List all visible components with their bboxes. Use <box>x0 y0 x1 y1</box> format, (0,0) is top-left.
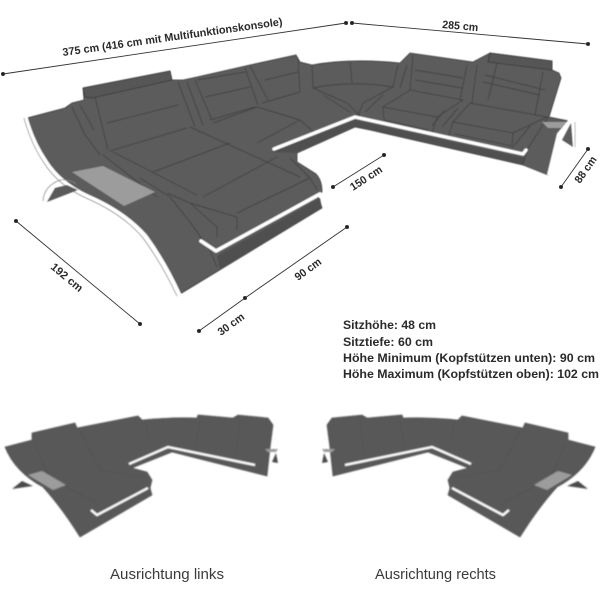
dimension labels <box>48 16 600 338</box>
label: 30 cm: 30 cm <box>216 311 247 338</box>
dimension: 150 cm <box>331 153 386 189</box>
right console tray <box>542 122 568 128</box>
small tray right <box>322 449 335 452</box>
legs <box>12 453 278 489</box>
faint seams <box>35 420 240 505</box>
cushion seams <box>72 55 548 267</box>
caption: right orientation: Ausrichtung rechts <box>375 567 496 583</box>
light strip chaise right <box>452 488 509 515</box>
caption: left orientation: Ausrichtung links <box>110 567 224 583</box>
legs right <box>322 453 588 489</box>
specifications text block <box>343 320 599 381</box>
dimension lines <box>1 21 590 333</box>
lower base shadow strips <box>217 120 525 270</box>
LED light strip: chaise section <box>201 194 320 251</box>
small sofa: left orientation <box>5 415 278 537</box>
dimension: 192 cm <box>14 219 142 326</box>
label: 375 cm: 375 cm (416 cm mit Multifunktionskonsole) <box>62 16 284 59</box>
spec: seat depth: Sitztiefe: 60 cm <box>343 337 433 349</box>
spec: seat height: Sitzhöhe: 48 cm <box>343 320 436 332</box>
label: 150 cm: 150 cm <box>348 164 385 194</box>
main sofa illustration <box>24 53 575 296</box>
silhouette right variant <box>327 415 595 537</box>
console tray right <box>534 471 572 490</box>
light strip chaise <box>91 488 148 515</box>
dimension: 30 cm <box>197 296 247 333</box>
dimension: 88 cm <box>559 147 590 189</box>
label: 90 cm: 90 cm <box>293 256 324 283</box>
LED light strip: right section <box>274 117 526 154</box>
light strip upper right <box>345 447 471 465</box>
left console tray <box>72 166 155 206</box>
left arm outer outline <box>24 118 177 296</box>
dimension: width 285 cm <box>350 21 590 46</box>
label: 285 cm: 285 cm <box>442 19 479 34</box>
right leg <box>548 120 575 175</box>
small sofa: right orientation <box>322 415 595 537</box>
dimension: 90 cm <box>245 225 349 298</box>
label: 88 cm: 88 cm <box>573 154 600 186</box>
faint seams right <box>360 420 565 505</box>
console tray <box>28 471 66 490</box>
sofa silhouette <box>27 53 569 294</box>
light strip upper <box>129 447 255 465</box>
right arm face <box>523 117 558 175</box>
spec: minimum height: Höhe Minimum (Kopfstützen unten): 90 cm <box>343 353 595 365</box>
spec: maximum height: Höhe Maximum (Kopfstützen oben): 102 cm <box>343 369 599 381</box>
left leg <box>43 180 78 202</box>
headrests <box>83 53 552 98</box>
dimension: width 375 cm <box>1 21 348 76</box>
right tray <box>265 449 278 452</box>
label: 192 cm: 192 cm <box>48 261 85 295</box>
silhouette left variant <box>5 415 273 537</box>
left white arm edge <box>26 117 180 295</box>
